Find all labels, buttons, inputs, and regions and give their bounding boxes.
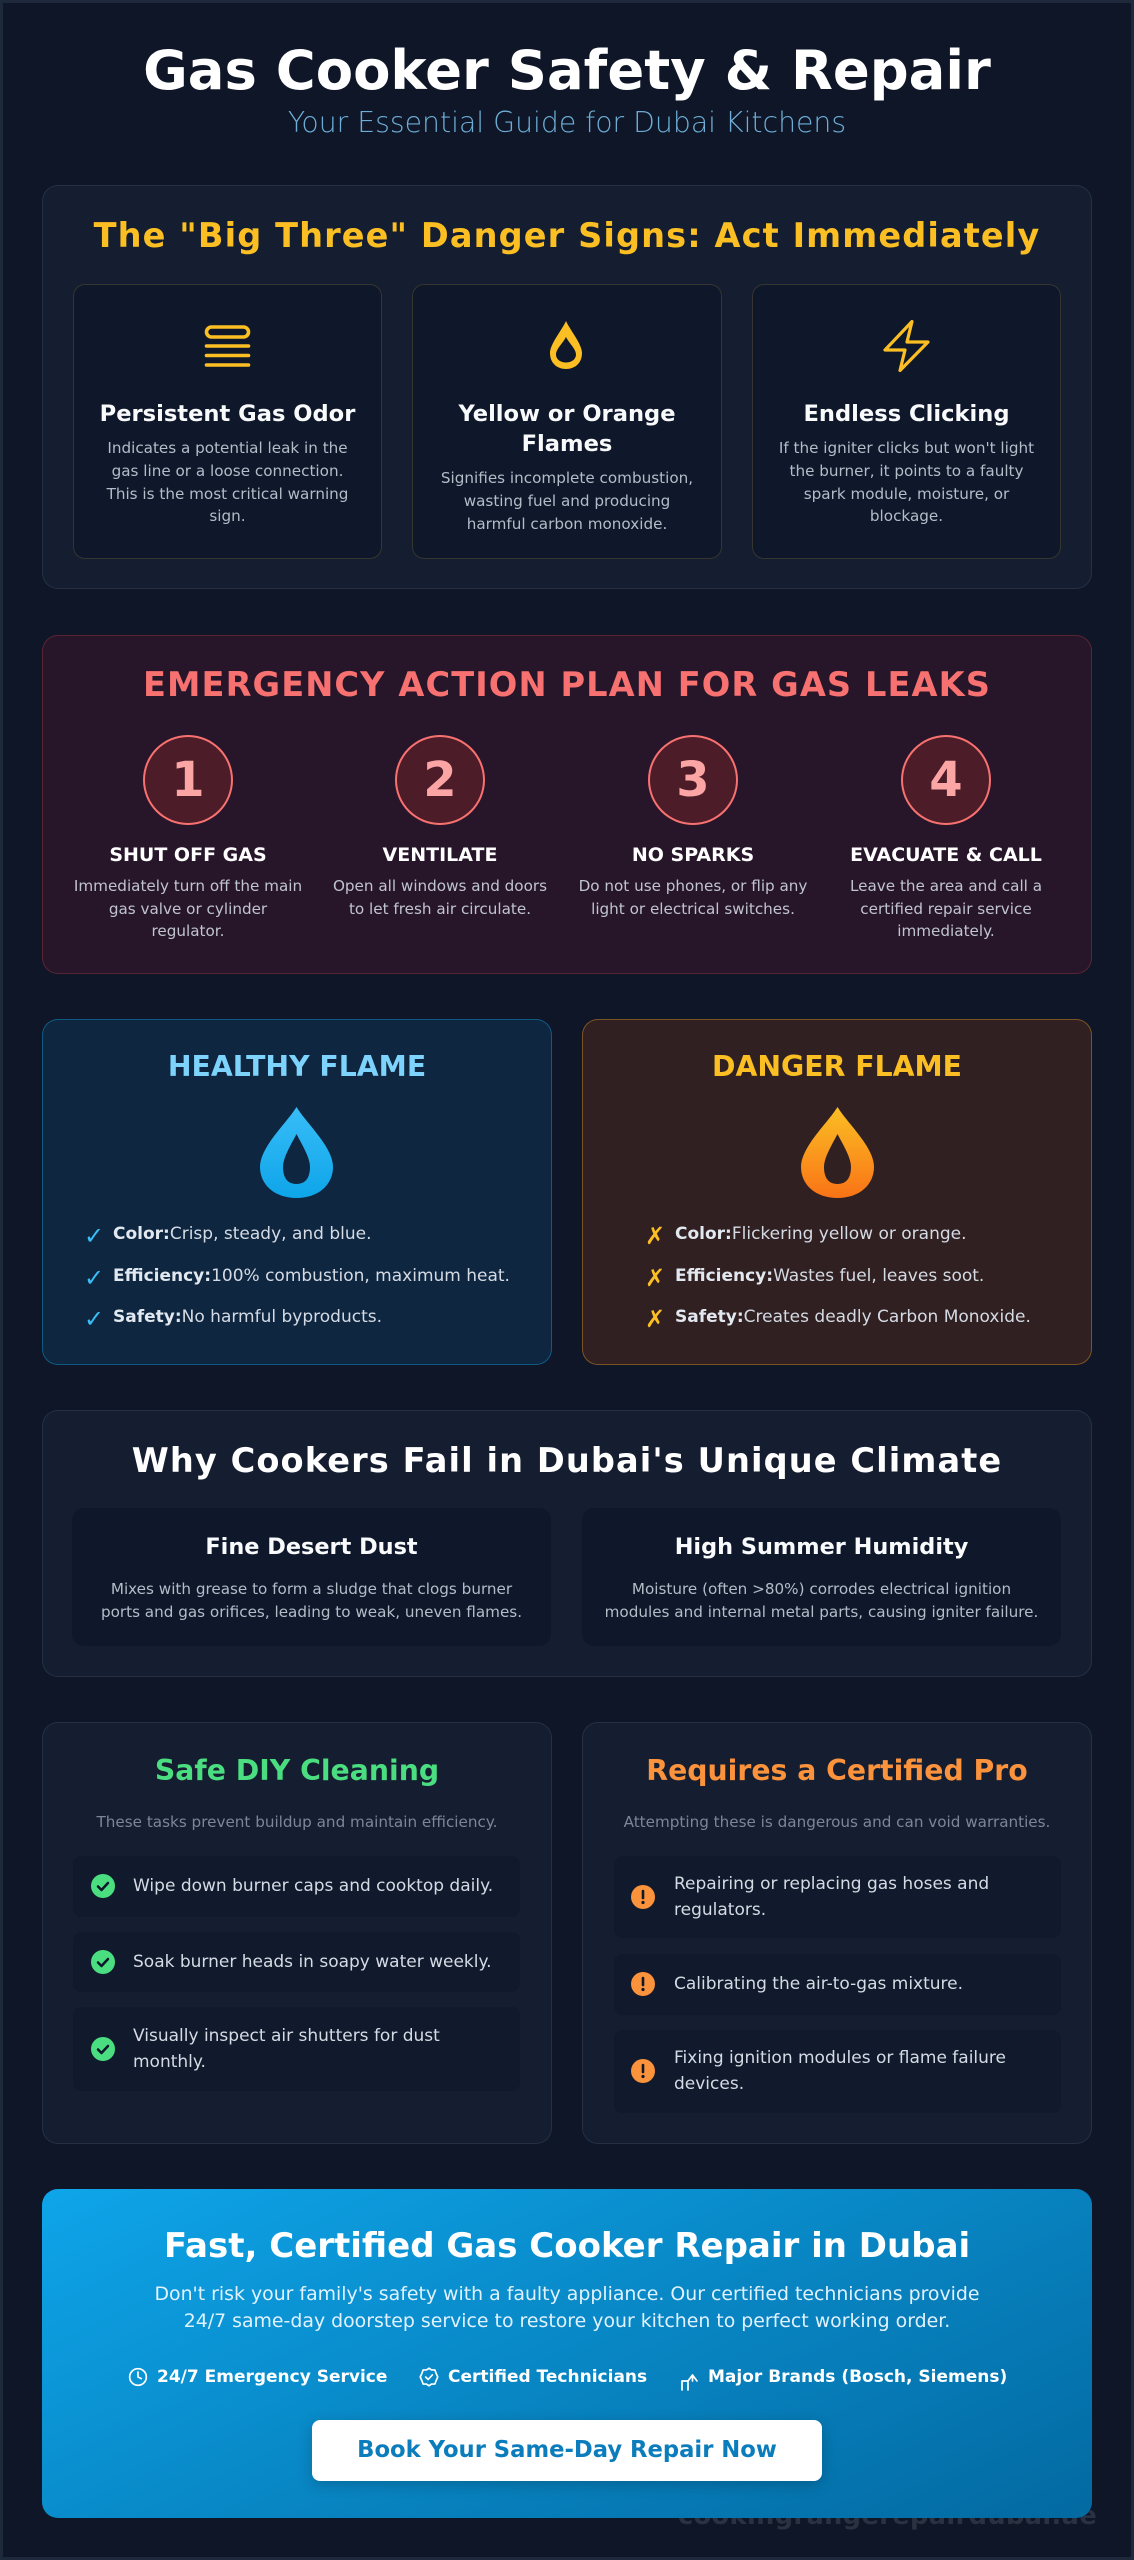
icon: check — [91, 1950, 115, 1974]
step description: light or electrical switches. — [591, 900, 795, 918]
item text: regulators. — [674, 1900, 766, 1920]
step description: immediately. — [897, 922, 995, 940]
number 3: 3 — [676, 752, 710, 808]
heading: CTA: Fast, Certified Gas Cooker Repair in Dubai — [164, 2226, 970, 2266]
step description — [850, 877, 1042, 940]
card: persistent gas odor — [73, 284, 382, 559]
card title: Fine Desert Dust — [205, 1534, 418, 1560]
panel: healthy flame — [42, 1019, 552, 1365]
card description: If the igniter clicks but won't light — [779, 439, 1034, 457]
number 2: 2 — [423, 752, 457, 808]
card description: ports and gas orifices, leading to weak, uneven flames. — [101, 1603, 522, 1621]
step description: gas valve or cylinder — [109, 900, 267, 918]
cross mark: ✗ — [645, 1305, 665, 1333]
number 3 — [648, 735, 738, 825]
panel: emergency action plan — [42, 635, 1092, 974]
card description: blockage. — [870, 507, 943, 525]
number 1 — [143, 735, 233, 825]
icon: check — [91, 2037, 115, 2061]
CTA paragraph: 24/7 same-day doorstep service to restore your kitchen to perfect working order. — [184, 2310, 950, 2332]
icon: shield check — [419, 2367, 439, 2387]
heading: healthy flame: HEALTHY FLAME — [168, 1050, 426, 1083]
heading: danger signs: The "Big Three" Danger Signs: Act Immediately — [94, 216, 1040, 255]
card description: modules and internal metal parts, causing igniter failure. — [605, 1603, 1038, 1621]
item text: Wipe down burner caps and cooktop daily. — [133, 1876, 493, 1896]
step 3 — [579, 735, 807, 918]
icon: brand tools — [680, 2372, 700, 2392]
step title: NO SPARKS — [632, 844, 754, 866]
safety fact: Safety:No harmful byproducts. — [113, 1307, 382, 1327]
step description: Leave the area and call a — [850, 877, 1042, 895]
card description: Indicates a potential leak in the — [107, 439, 348, 457]
panel: danger flame — [582, 1019, 1092, 1365]
card description — [101, 1580, 522, 1621]
feature: technicians: Certified Technicians — [448, 2367, 647, 2387]
card description: Signifies incomplete combustion, — [441, 469, 693, 487]
item text: monthly. — [133, 2052, 206, 2072]
card description: the burner, it points to a faulty — [790, 462, 1024, 480]
card description — [441, 469, 693, 533]
item text: Repairing or replacing gas hoses and — [674, 1874, 989, 1894]
efficiency fact: Efficiency:100% combustion, maximum heat. — [113, 1266, 510, 1286]
card title: Endless Clicking — [803, 401, 1010, 427]
item text — [133, 2026, 440, 2072]
number 1: 1 — [171, 752, 205, 808]
card description — [779, 439, 1034, 525]
heading: certified pro: Requires a Certified Pro — [646, 1754, 1028, 1787]
panel: safe DIY cleaning — [42, 1722, 552, 2144]
item text — [674, 1874, 989, 1920]
item text: Fixing ignition modules or flame failure — [674, 2048, 1006, 2068]
panel: why cookers fail — [42, 1410, 1092, 1677]
card description: wasting fuel and producing — [464, 492, 670, 510]
card: yellow or orange flames — [412, 284, 722, 559]
step description — [333, 877, 547, 918]
icon: warning — [631, 2059, 655, 2083]
card description — [106, 439, 348, 525]
color fact: Color:Flickering yellow or orange. — [675, 1224, 966, 1244]
card description: harmful carbon monoxide. — [467, 515, 667, 533]
card description: sign. — [209, 507, 246, 525]
button: Book Your Same-Day Repair Now — [357, 2437, 777, 2463]
list: healthy facts — [84, 1222, 510, 1333]
icon: blue flame — [260, 1107, 333, 1198]
color fact: Color:Crisp, steady, and blue. — [113, 1224, 371, 1244]
cross mark: ✗ — [645, 1264, 665, 1292]
subtitle: Your Essential Guide for Dubai Kitchens — [288, 106, 846, 139]
CTA paragraph: Don't risk your family's safety with a faulty appliance. Our certified technicians provide — [154, 2283, 980, 2305]
card title: High Summer Humidity — [675, 1534, 968, 1560]
item: hoses — [614, 1856, 1061, 1938]
intro text: These tasks prevent buildup and maintain efficiency. — [97, 1813, 497, 1831]
step description: certified repair service — [860, 900, 1032, 918]
title: Gas Cooker Safety & Repair — [143, 39, 991, 102]
item text: Calibrating the air-to-gas mixture. — [674, 1974, 963, 1994]
item: wipe down — [73, 1856, 520, 1917]
icon: warning — [631, 1972, 655, 1996]
number 4 — [901, 735, 991, 825]
item text: Soak burner heads in soapy water weekly. — [133, 1952, 492, 1972]
card description — [605, 1580, 1038, 1621]
card description: spark module, moisture, or — [804, 485, 1009, 503]
card title — [458, 401, 676, 457]
step description — [579, 877, 807, 918]
step 1 — [74, 735, 302, 940]
item: soak — [73, 1932, 520, 1992]
check mark: ✓ — [84, 1264, 104, 1292]
step 4 — [850, 735, 1042, 940]
icon: lightning bolt — [883, 320, 930, 372]
item: calibrating — [614, 1954, 1061, 2015]
cross mark: ✗ — [645, 1222, 665, 1250]
number 2 — [395, 735, 485, 825]
card title: Persistent Gas Odor — [100, 401, 355, 427]
item text — [674, 2048, 1006, 2094]
step title: EVACUATE & CALL — [850, 844, 1042, 866]
card title: Flames — [522, 431, 612, 457]
panel: requires a certified pro — [582, 1722, 1092, 2144]
step title: SHUT OFF GAS — [109, 844, 267, 866]
item: ignition modules — [614, 2030, 1061, 2113]
heading: safe DIY: Safe DIY Cleaning — [155, 1754, 439, 1787]
item: inspect — [73, 2007, 520, 2091]
safety fact: Safety:Creates deadly Carbon Monoxide. — [675, 1307, 1031, 1327]
card: endless clicking — [752, 284, 1061, 559]
step 2 — [333, 735, 547, 918]
card: summer humidity — [582, 1508, 1061, 1646]
icon: clock — [128, 2368, 148, 2386]
step description — [74, 877, 302, 940]
heading: emergency: EMERGENCY ACTION PLAN FOR GAS LEAKS — [143, 665, 991, 704]
card description: gas line or a loose connection. — [112, 462, 343, 480]
icon: drop — [550, 321, 582, 369]
efficiency fact: Efficiency:Wastes fuel, leaves soot. — [675, 1266, 984, 1286]
feature row — [128, 2367, 1007, 2391]
step description: Do not use phones, or flip any — [579, 877, 807, 895]
list: danger facts — [645, 1222, 1031, 1333]
step description: Open all windows and doors — [333, 877, 547, 895]
card title: Yellow or Orange — [458, 401, 676, 427]
card description: Mixes with grease to form a sludge that clogs burner — [111, 1580, 512, 1598]
step description: Immediately turn off the main — [74, 877, 302, 895]
step title: VENTILATE — [383, 844, 497, 866]
panel: big three danger signs — [42, 185, 1092, 589]
check mark: ✓ — [84, 1305, 104, 1333]
icon: check — [91, 1874, 115, 1898]
panel: call to action — [42, 2189, 1092, 2518]
card description: This is the most critical warning — [107, 485, 348, 503]
step description: regulator. — [152, 922, 224, 940]
intro text: Attempting these is dangerous and can void warranties. — [624, 1813, 1050, 1831]
card: desert dust — [72, 1508, 551, 1646]
item text: Visually inspect air shutters for dust — [133, 2026, 440, 2046]
item text: devices. — [674, 2074, 744, 2094]
feature: brands: Major Brands (Bosch, Siemens) — [708, 2367, 1007, 2387]
check mark: ✓ — [84, 1222, 104, 1250]
watermark: cookingrangerepairdubai.ae — [678, 2501, 1097, 2531]
icon: orange flame — [801, 1107, 874, 1198]
heading: why cookers fail: Why Cookers Fail in Dubai's Unique Climate — [132, 1441, 1002, 1480]
card description: Moisture (often >80%) corrodes electrical ignition — [632, 1580, 1011, 1598]
icon: warning — [631, 1885, 655, 1909]
number 4: 4 — [929, 752, 963, 808]
step description: to let fresh air circulate. — [349, 900, 531, 918]
CTA paragraph — [154, 2283, 980, 2332]
heading: danger flame: DANGER FLAME — [712, 1050, 962, 1083]
icon: gas lines — [204, 325, 250, 367]
feature: emergency: 24/7 Emergency Service — [157, 2367, 387, 2387]
button — [312, 2420, 822, 2481]
